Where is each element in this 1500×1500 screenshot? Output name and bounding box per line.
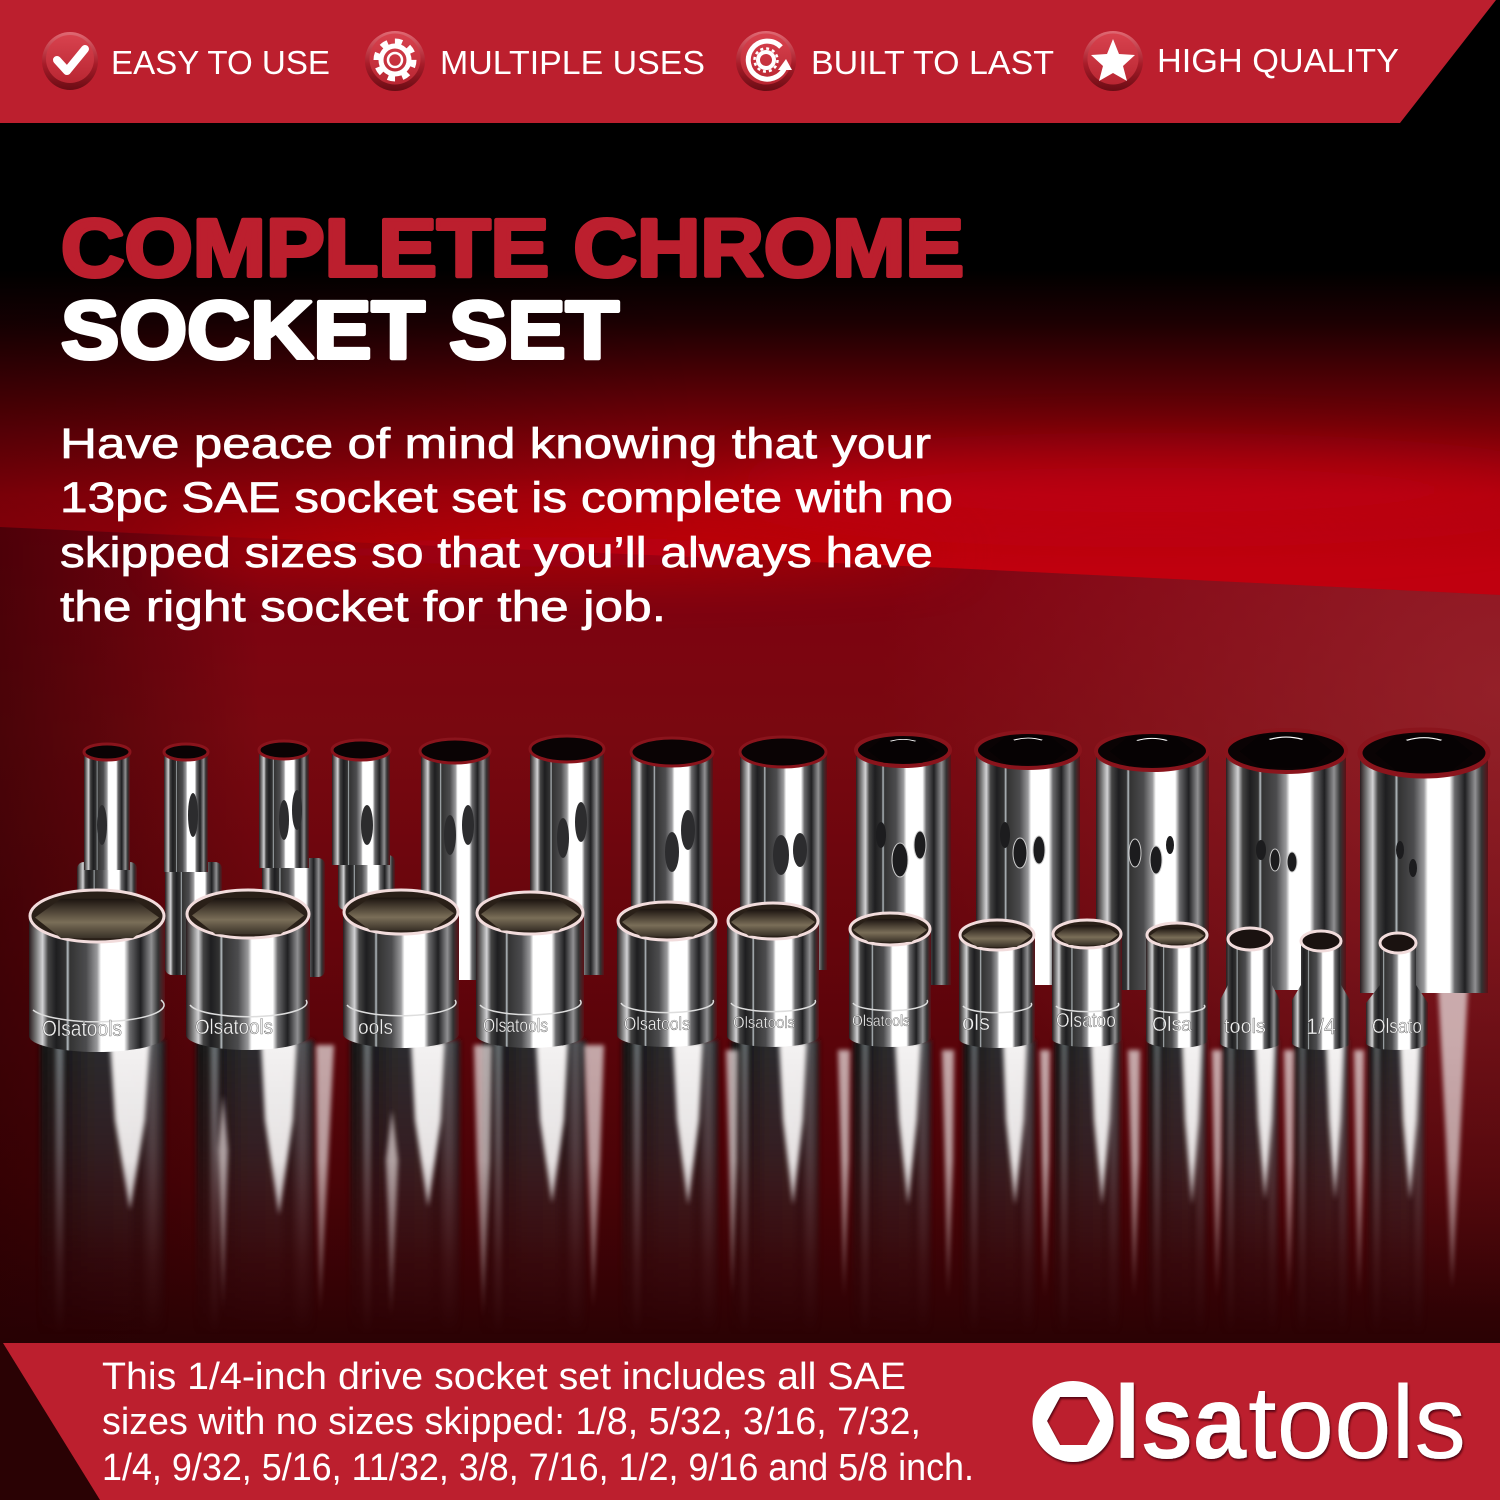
top banner — [0, 0, 1496, 123]
shallow socket 1: Olsatools — [42, 1016, 122, 1041]
shallow socket 11: tools — [1224, 1016, 1266, 1038]
socket reflections on table — [38, 993, 1471, 1303]
shallow socket 12 — [1292, 931, 1350, 1050]
reflection: dark chrome columns — [38, 1037, 1428, 1300]
deep socket 10 — [976, 732, 1080, 985]
body text: skipped sizes so that you’ll always have — [60, 529, 933, 577]
shallow socket 8: ols — [962, 1010, 990, 1035]
deep socket 7 — [631, 738, 713, 960]
shallow sockets row — [29, 890, 1428, 1052]
shallow socket 9: Olsatoo — [1056, 1010, 1116, 1032]
deep socket 2 — [164, 744, 222, 975]
icon: gear badge — [365, 31, 425, 91]
title: COMPLETE CHROME — [61, 203, 964, 294]
shallow socket 7: Olsatools — [852, 1013, 910, 1030]
deep socket 5 — [420, 739, 490, 980]
shallow socket 2 — [186, 890, 310, 1050]
size list text: 1/4, 9/32, 5/16, 11/32, 3/8, 7/16, 1/2, 9/16 and 5/8 inch. — [102, 1447, 974, 1489]
shallow socket 5 — [617, 902, 717, 1047]
shallow socket 8 — [959, 920, 1035, 1048]
shallow socket 13 — [1366, 933, 1428, 1050]
size list text — [102, 1356, 974, 1489]
shallow socket 9 — [1052, 920, 1122, 1047]
shallow socket 2: Olsatools — [195, 1016, 273, 1039]
shallow socket 4 — [476, 892, 584, 1048]
body text: Have peace of mind knowing that your — [60, 420, 931, 468]
shallow socket 1 — [29, 890, 165, 1052]
reflection: bright tapering streaks — [110, 985, 1468, 1320]
label: built to last: BUILT TO LAST — [811, 44, 1054, 81]
shallow socket 10: Olsa — [1152, 1014, 1193, 1036]
deep socket 9 — [856, 734, 951, 985]
deep socket 11 — [1096, 732, 1209, 990]
deep socket 3 — [259, 741, 325, 977]
title: SOCKET SET — [61, 285, 619, 376]
body text: the right socket for the job. — [60, 583, 666, 631]
deep socket 4 — [332, 740, 395, 910]
shallow socket 5: Olsatools — [624, 1014, 690, 1034]
logo: Olsatools: tools — [1248, 1365, 1466, 1481]
logo: Olsatools: lsa — [1114, 1365, 1247, 1481]
label: easy to use: EASY TO USE — [111, 44, 330, 81]
deep socket 1 — [77, 744, 137, 898]
shallow socket 3 — [343, 890, 459, 1048]
deep socket 6 — [530, 736, 604, 975]
deep socket 13 — [1360, 730, 1488, 993]
bottom banner — [3, 1343, 1500, 1500]
title — [61, 203, 964, 376]
icon: check mark badge — [42, 32, 98, 90]
deep socket 8 — [740, 737, 827, 970]
shallow socket 10 — [1146, 923, 1208, 1048]
deep sockets row — [77, 730, 1488, 993]
shallow socket 4: Olsatools — [483, 1016, 548, 1037]
body text: 13pc SAE socket set is complete with no — [60, 474, 953, 522]
logo: Olsatools: O — [1033, 1360, 1117, 1481]
shallow socket 3: ools — [358, 1017, 393, 1039]
label: multiple uses: MULTIPLE USES — [440, 44, 705, 81]
size list text: sizes with no sizes skipped: 1/8, 5/32, 3/16, 7/32, — [102, 1401, 921, 1443]
shallow socket 6: Olsatools — [733, 1013, 795, 1032]
icon: star badge — [1083, 31, 1143, 91]
shallow socket 11 — [1220, 928, 1280, 1050]
shallow socket 6 — [727, 903, 819, 1047]
shallow socket 13: Olsato — [1372, 1016, 1422, 1038]
size list text: This 1/4-inch drive socket set includes all SAE — [102, 1356, 906, 1398]
icon: rotating gear badge — [736, 31, 796, 91]
logo: Olsatools — [1033, 1360, 1466, 1481]
deep socket 12 — [1226, 730, 1346, 990]
background: glossy red table surface — [0, 527, 1500, 1500]
body text — [60, 420, 953, 631]
label: high quality: HIGH QUALITY — [1157, 42, 1399, 79]
shallow socket 12: 1/4 — [1306, 1014, 1336, 1039]
shallow socket 7 — [849, 913, 931, 1047]
